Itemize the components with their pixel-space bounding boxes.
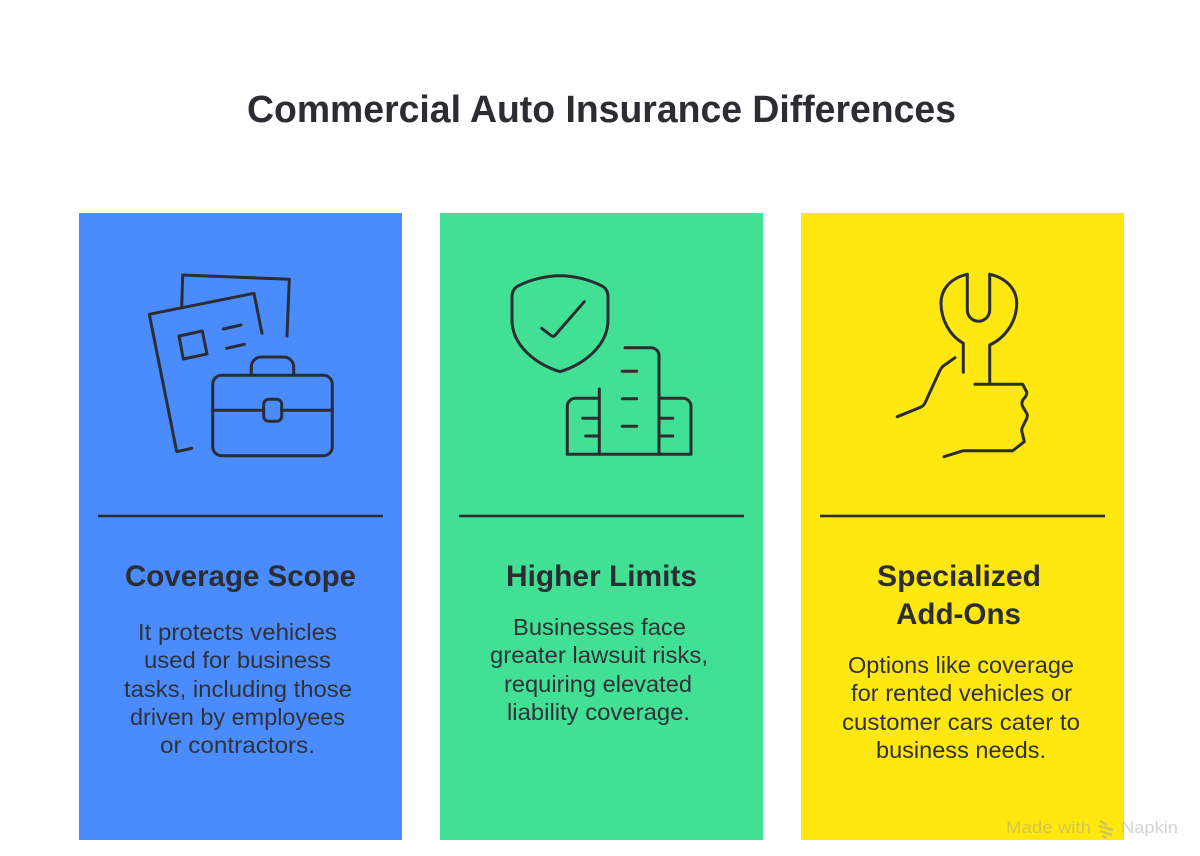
- text: coverage scope description: [124, 619, 352, 758]
- heading: coverage scope: Coverage Scope: [125, 560, 356, 593]
- text: higher limits description: [490, 614, 708, 725]
- watermark: made with napkin: Napkin: [1121, 818, 1178, 837]
- text: higher limits description: liability coverage.: [507, 699, 690, 725]
- heading: specialized add-ons: Add-Ons: [896, 598, 1021, 631]
- text: specialized add-ons description: [842, 652, 1080, 763]
- watermark: made with napkin: Made with: [1006, 818, 1091, 837]
- text: specialized add-ons description: Options like coverage: [848, 652, 1074, 678]
- watermark: made with napkin: [1006, 818, 1178, 838]
- text: coverage scope description: used for business: [144, 647, 331, 673]
- text: higher limits description: Businesses face: [513, 614, 686, 640]
- heading: specialized add-ons: [877, 560, 1041, 631]
- icon: shield and buildings: [512, 276, 691, 454]
- icon: hand holding wrench: [897, 274, 1027, 457]
- text: coverage scope description: driven by employees: [130, 704, 345, 730]
- text: specialized add-ons description: for rented vehicles or: [851, 680, 1072, 706]
- text: higher limits description: greater lawsuit risks,: [490, 642, 708, 668]
- text: specialized add-ons description: customer cars cater to: [842, 709, 1080, 735]
- text: specialized add-ons description: business needs.: [876, 737, 1046, 763]
- title: Commercial Auto Insurance Differences: [247, 89, 956, 131]
- panel: higher limits: [440, 213, 763, 840]
- text: coverage scope description: It protects vehicles: [138, 619, 337, 645]
- text: coverage scope description: tasks, including those: [124, 676, 352, 702]
- panel: coverage scope: [79, 213, 402, 840]
- heading: higher limits: Higher Limits: [506, 560, 697, 593]
- icon: documents and briefcase: [149, 275, 332, 456]
- text: coverage scope description: or contractors.: [160, 732, 315, 758]
- panel: specialized add-ons: [801, 213, 1124, 840]
- text: higher limits description: requiring elevated: [504, 671, 692, 697]
- heading: specialized add-ons: Specialized: [877, 560, 1041, 593]
